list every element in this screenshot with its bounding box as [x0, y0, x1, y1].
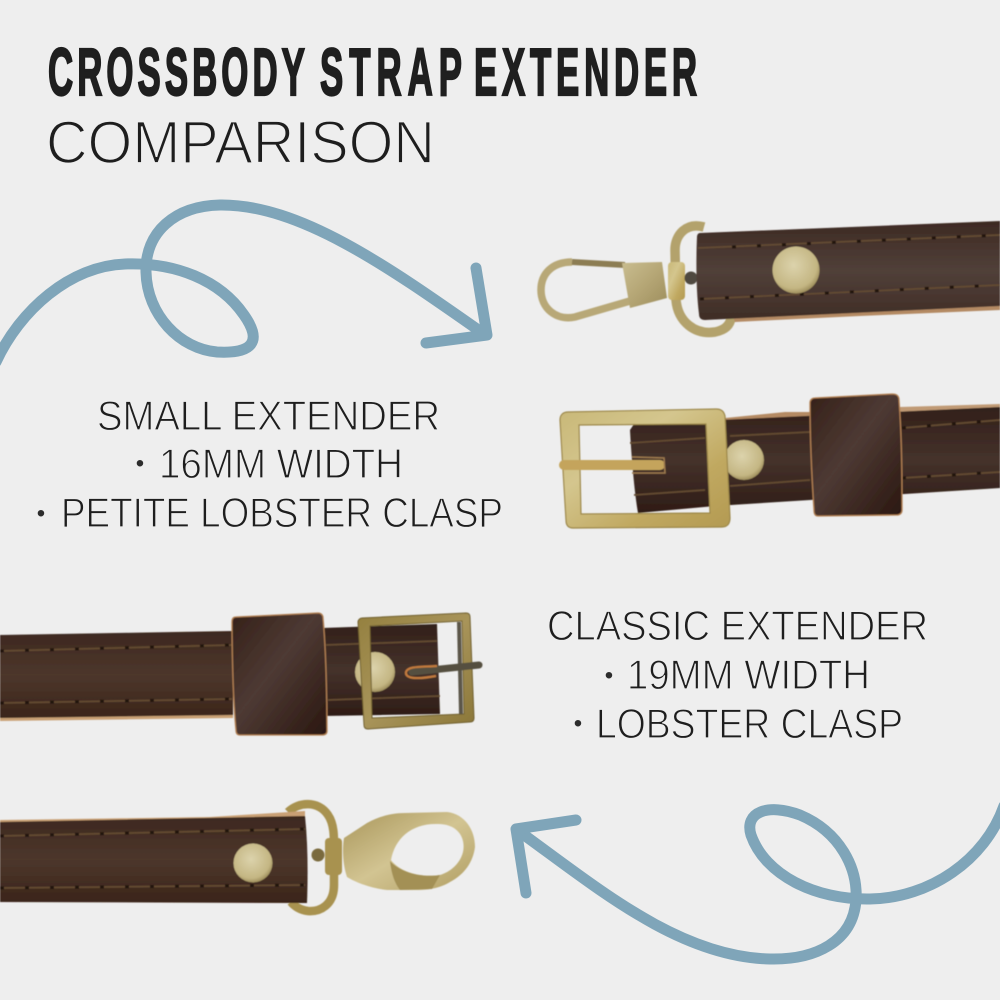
text block: small extender: [37, 392, 503, 536]
D-ring: [288, 804, 334, 911]
title line 1: EXTENDER: [474, 36, 697, 110]
title line 1: CROSSBODY: [48, 36, 305, 110]
text block: small extender: 16MM WIDTH: [159, 440, 403, 487]
title line 1: [48, 36, 697, 110]
strap leather: [725, 412, 812, 422]
arrow: top swirl pointing to small extender: [0, 205, 487, 362]
rivet: [355, 652, 395, 692]
text block: small extender: PETITE LOBSTER CLASP: [61, 489, 503, 536]
rivet: [234, 844, 272, 882]
text block: classic extender: •: [605, 662, 613, 689]
stitching: [630, 420, 1000, 495]
text block: small extender: •: [37, 500, 45, 527]
buckle pin: [564, 460, 660, 470]
text block: classic extender: LOBSTER CLASP: [596, 700, 903, 747]
D-ring: [675, 226, 731, 332]
strap: classic extender with lobster clasp: [0, 804, 475, 911]
strap: small extender with buckle: [560, 394, 1000, 528]
text block: classic extender: CLASSIC EXTENDER: [547, 602, 928, 649]
rivet: [772, 246, 820, 294]
text block: small extender: SMALL EXTENDER: [97, 392, 440, 439]
text block: classic extender: [547, 602, 928, 747]
stitching: [0, 641, 440, 703]
strap: small extender with lobster clasp: [541, 221, 1000, 332]
text block: classic extender: 19MM WIDTH: [627, 651, 870, 698]
lobster clasp: [541, 262, 698, 318]
rivet: [724, 440, 764, 480]
strap: classic extender with buckle: [0, 613, 479, 735]
arrow: bottom swirl pointing to classic extender: [516, 806, 1000, 959]
title line 2: COMPARISON: [46, 109, 435, 176]
text block: small extender: •: [136, 450, 144, 477]
text block: classic extender: •: [574, 710, 582, 737]
lobster clasp: [312, 812, 475, 890]
title line 1: STRAP: [320, 36, 462, 110]
buckle: [358, 613, 474, 729]
strap leather: [0, 811, 305, 824]
keeper loop: [810, 394, 902, 516]
stitching: [698, 235, 1000, 299]
buckle: [560, 409, 730, 528]
stitching: [0, 829, 305, 888]
buckle inner wall: [459, 622, 461, 714]
keeper loop: [232, 613, 327, 735]
buckle pin: [412, 665, 479, 672]
strap leather: [0, 631, 233, 719]
title: [46, 36, 697, 176]
strap leather: [733, 304, 1000, 322]
